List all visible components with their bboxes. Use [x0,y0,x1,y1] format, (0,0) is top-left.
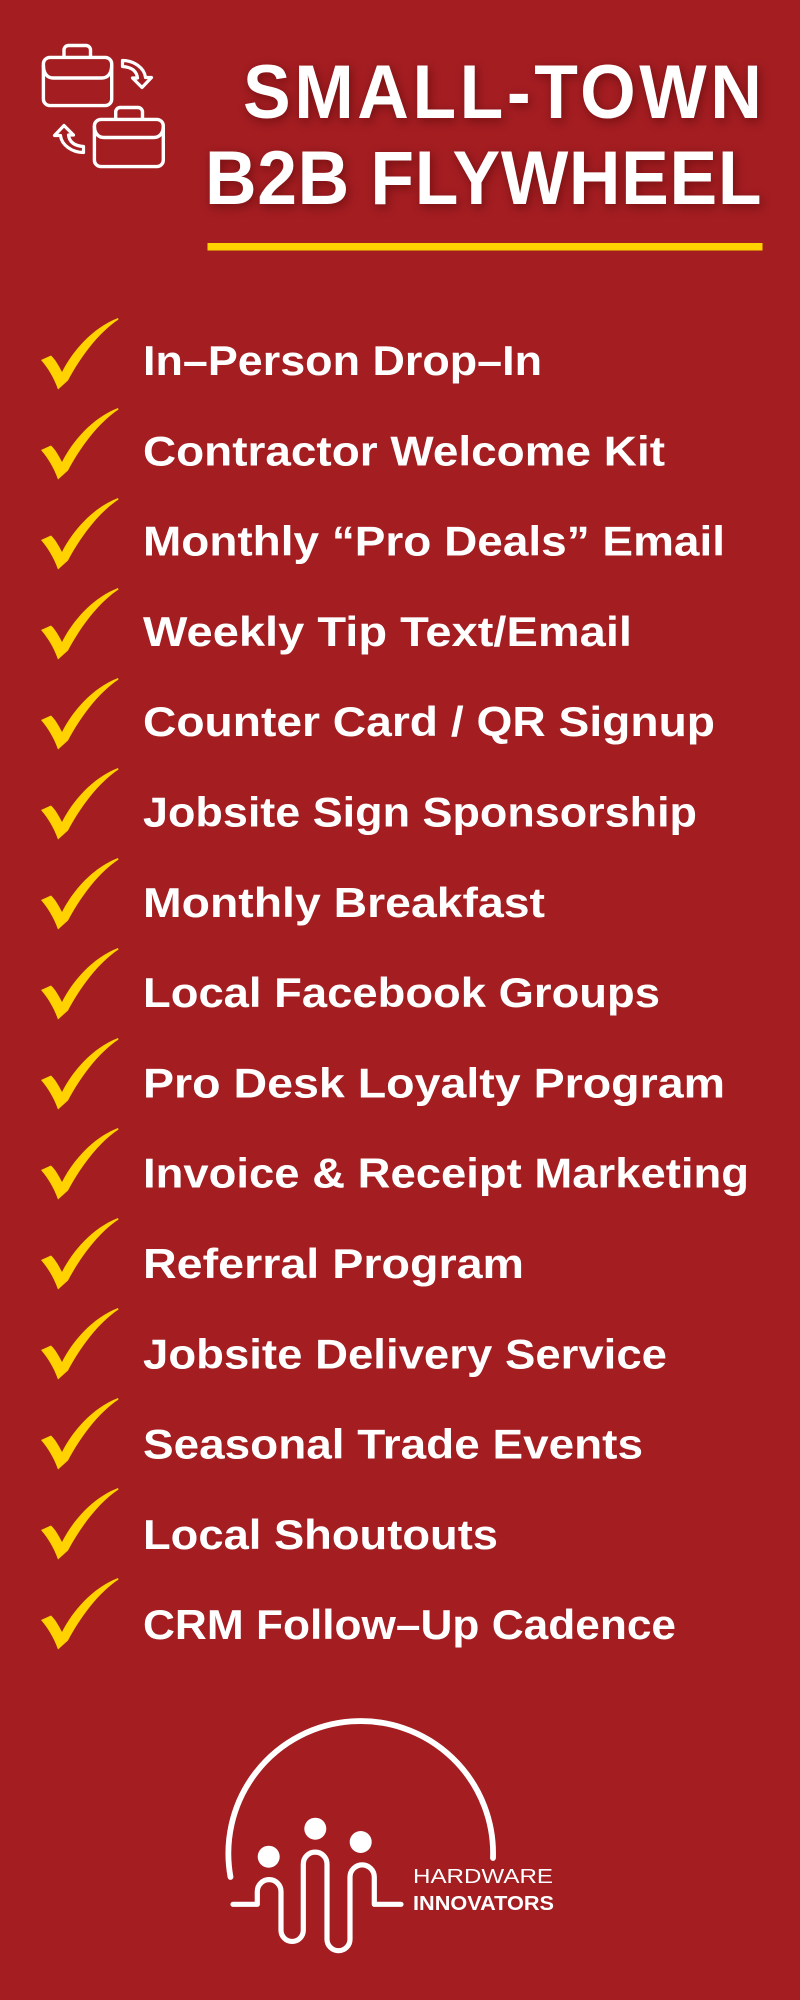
item: Jobsite Sign Sponsorship: Jobsite Sign Sponsorship [143,788,697,836]
item: Seasonal Trade Events: Seasonal Trade Events [143,1421,643,1468]
item: Jobsite Delivery Service [41,1308,667,1380]
item: Referral Program: Referral Program [143,1240,524,1287]
logo mark [228,1721,493,1951]
item: Invoice & Receipt Marketing [41,1128,749,1200]
item: Counter Card / QR Signup [41,678,715,750]
item: Pro Desk Loyalty Program: Pro Desk Loyalty Program [143,1059,725,1106]
item: Jobsite Sign Sponsorship [41,768,697,840]
item: Contractor Welcome Kit [41,408,665,480]
item: Counter Card / QR Signup: Counter Card / QR Signup [143,698,715,745]
item: In-Person Drop-In [41,318,542,390]
icon: briefcases with swap arrows [43,46,163,167]
item: Invoice & Receipt Marketing: Invoice & Receipt Marketing [143,1150,749,1197]
checklist [41,318,749,1650]
item: Referral Program [41,1218,524,1290]
title [205,49,762,220]
item: Local Shoutouts: Local Shoutouts [143,1511,498,1558]
item: Monthly Breakfast: Monthly Breakfast [143,879,545,926]
item: Seasonal Trade Events [41,1398,643,1470]
item: Jobsite Delivery Service: Jobsite Delivery Service [143,1330,667,1377]
logo wordmark [413,1866,554,1915]
logo wordmark: HARDWARE [413,1866,553,1888]
item: Contractor Welcome Kit: Contractor Welcome Kit [143,427,665,474]
item: Local Shoutouts [41,1488,498,1560]
item: Pro Desk Loyalty Program [41,1038,725,1110]
item: Weekly Tip Text/Email: Weekly Tip Text/Email [143,608,632,655]
item: Monthly Pro Deals Email [41,498,725,570]
item: CRM Follow-Up Cadence [41,1578,676,1650]
item: Weekly Tip Text/Email [41,588,632,660]
logo: Hardware Innovators [228,1721,554,1951]
item: Monthly Pro Deals Email: Monthly “Pro Deals” Email [143,518,725,565]
item: Local Facebook Groups: Local Facebook Groups [143,969,660,1016]
item: CRM Follow-Up Cadence: CRM Follow–Up Cadence [143,1601,676,1648]
item: In-Person Drop-In: In–Person Drop–In [143,337,542,384]
logo wordmark: INNOVATORS [413,1893,554,1915]
item: Local Facebook Groups [41,948,660,1020]
title: B2B FLYWHEEL [205,135,761,220]
title underline [208,243,762,250]
item: Monthly Breakfast [41,858,545,930]
title: SMALL-TOWN [243,49,762,134]
